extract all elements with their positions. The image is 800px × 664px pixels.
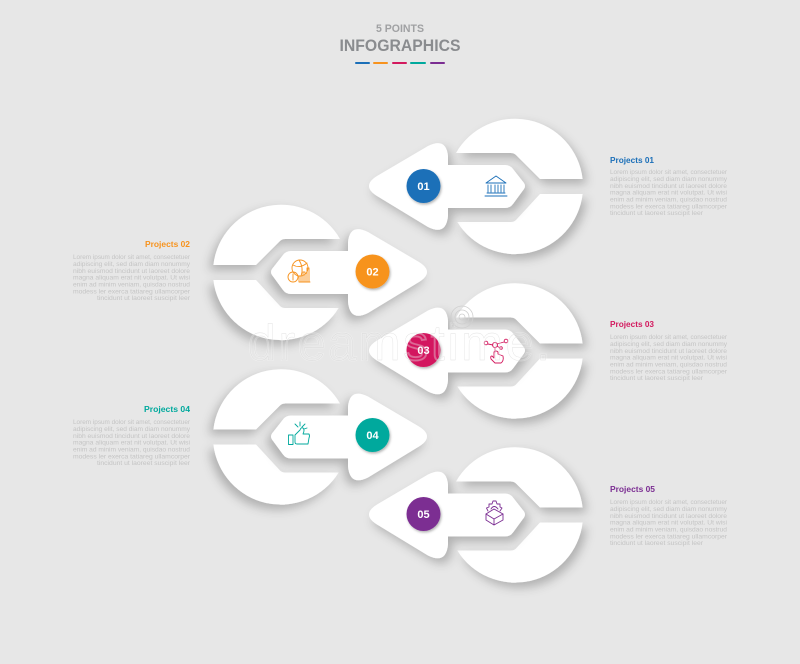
text block: projects 05: nibh euismod tincidunt ut laoreet dolore [610, 513, 728, 520]
split circle and arrow [369, 283, 583, 419]
icon: box with gear [486, 501, 503, 525]
text block: projects 04: Projects 04 [144, 404, 190, 414]
text block: projects 03: nibh euismod tincidunt ut laoreet dolore [610, 348, 728, 355]
heading: INFOGRAPHICS [340, 36, 460, 55]
text block: projects 02 [73, 239, 191, 302]
text block: projects 02: Lorem ipsum dolor sit amet, consectetuer [73, 254, 190, 261]
number badge 03 [406, 333, 440, 367]
text block: projects 04: tincidunt ut laoreet suscipit leer [97, 460, 190, 467]
text block: projects 05 [610, 484, 728, 547]
text block: projects 02: Projects 02 [145, 239, 190, 249]
number badge 02: 02 [366, 266, 379, 278]
split circle and arrow [369, 447, 583, 583]
colored dashes [356, 62, 444, 64]
text block: projects 04: enim ad minim veniam, quisdao nostrud [73, 446, 191, 454]
text block: projects 01 [610, 155, 728, 217]
text block: projects 02: adipiscing elit, sed diam diam nonummy [73, 261, 191, 268]
number badge 01 [406, 169, 440, 203]
text block: projects 03: magna aliquam erat nit volutpat. Ut wisi [610, 354, 727, 362]
number badge 01: 01 [417, 181, 430, 193]
number badge 04 [356, 418, 390, 452]
text block: projects 03: Lorem ipsum dolor sit amet, consectetuer [610, 334, 727, 341]
number badge 05: 05 [417, 509, 430, 521]
text block: projects 05: Lorem ipsum dolor sit amet, consectetuer [610, 499, 727, 506]
text block: projects 03: Projects 03 [610, 319, 654, 329]
text block: projects 05: magna aliquam erat nit volutpat. Ut wisi [610, 520, 727, 526]
text block: projects 02: enim ad minim veniam, quisdao nostrud [73, 282, 191, 288]
number badge 03: 03 [417, 345, 430, 357]
unit 04 [213, 369, 427, 505]
text block: projects 02: tincidunt ut laoreet suscipit leer [97, 295, 190, 302]
icon: globe and finance [288, 260, 310, 282]
text block: projects 04: adipiscing elit, sed diam diam nonummy [73, 426, 191, 433]
text block: projects 04: Lorem ipsum dolor sit amet, consectetuer [73, 419, 190, 426]
text block: projects 01: enim ad minim veniam, quisdao nostrud [610, 196, 728, 204]
text block: projects 04: magna aliquam erat nit volutpat. Ut wisi [73, 440, 190, 446]
text block: projects 01: tincidunt ut laoreet suscipit leer [610, 210, 703, 217]
text block: projects 05: modess ler exerca tatiareg ullamcorper [610, 534, 727, 540]
title [340, 23, 460, 63]
watermark: dreamstime. [248, 315, 550, 371]
unit 01 [369, 119, 583, 254]
unit 05 [369, 447, 583, 583]
text block: projects 02: modess ler exerca tatiareg ullamcorper [73, 288, 190, 296]
number badge 04: 04 [366, 430, 379, 442]
text block: projects 05: Projects 05 [610, 484, 655, 494]
text block: projects 02: magna aliquam erat nit volutpat. Ut wisi [73, 274, 190, 282]
watermark: dreamstime. [248, 315, 550, 371]
text block: projects 01: Lorem ipsum dolor sit amet, consectetuer [610, 169, 727, 176]
icon: thumbs up [288, 422, 310, 444]
unit 03 [369, 283, 583, 419]
text block: projects 03: tincidunt ut laoreet suscipit leer [610, 375, 703, 382]
text block: projects 05: adipiscing elit, sed diam diam nonummy [610, 506, 728, 513]
number badge 02 [356, 254, 390, 288]
text block: projects 03: modess ler exerca tatiareg ullamcorper [610, 368, 727, 376]
icon: touch network [484, 339, 508, 363]
text block: projects 01: Projects 01 [610, 155, 654, 165]
text block: projects 04: nibh euismod tincidunt ut laoreet dolore [73, 433, 191, 440]
text block: projects 01: adipiscing elit, sed diam diam nonummy [610, 176, 728, 183]
text block: projects 01: modess ler exerca tatiareg ullamcorper [610, 204, 727, 210]
text block: projects 01: magna aliquam erat nit volutpat. Ut wisi [610, 190, 727, 196]
split circle and arrow [213, 369, 427, 505]
text block: projects 03: enim ad minim veniam, quisdao nostrud [610, 362, 728, 368]
text block: projects 04 [73, 404, 191, 467]
split circle and arrow [213, 205, 427, 340]
text block: projects 01: nibh euismod tincidunt ut laoreet dolore [610, 183, 728, 190]
subtitle: 5 POINTS [376, 23, 424, 35]
text block: projects 05: tincidunt ut laoreet suscipit leer [610, 540, 703, 547]
icon: bank [485, 176, 507, 196]
text block: projects 04: modess ler exerca tatiareg ullamcorper [73, 454, 190, 460]
text block: projects 02: nibh euismod tincidunt ut laoreet dolore [73, 268, 191, 275]
text block: projects 03 [610, 319, 728, 382]
number badge 05 [406, 497, 440, 531]
text block: projects 03: adipiscing elit, sed diam diam nonummy [610, 341, 728, 348]
split circle and arrow [369, 119, 583, 254]
unit 02 [213, 205, 427, 340]
text block: projects 05: enim ad minim veniam, quisdao nostrud [610, 526, 728, 534]
